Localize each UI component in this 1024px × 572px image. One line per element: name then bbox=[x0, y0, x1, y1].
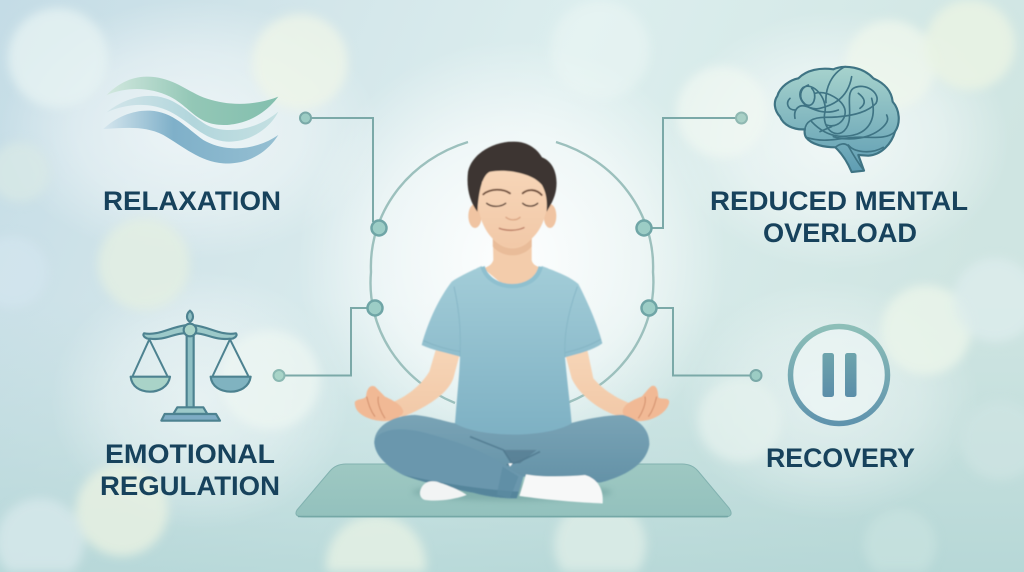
right hand bbox=[623, 386, 669, 421]
pants bbox=[374, 415, 649, 498]
label: reduced mental overload: REDUCED MENTAL bbox=[710, 186, 968, 216]
socks bbox=[420, 481, 467, 501]
icon: brain bbox=[775, 67, 899, 172]
label: reduced mental overload: OVERLOAD bbox=[763, 218, 917, 248]
left hand bbox=[355, 386, 403, 421]
label: recovery: RECOVERY bbox=[766, 443, 915, 473]
icon: waves bbox=[103, 77, 278, 163]
eyes closed bbox=[487, 203, 538, 206]
label: relaxation: RELAXATION bbox=[103, 186, 281, 216]
icon: balance scales bbox=[131, 311, 251, 421]
nose and mouth bbox=[506, 217, 520, 220]
yoga mat bbox=[296, 464, 731, 517]
face bbox=[477, 167, 548, 247]
hair bbox=[467, 142, 557, 212]
eyebrows bbox=[483, 190, 542, 195]
person meditating bbox=[355, 142, 669, 503]
connector: relaxation bbox=[300, 112, 386, 236]
label: emotional regulation bbox=[100, 439, 280, 501]
neck bbox=[483, 230, 543, 293]
ears bbox=[468, 204, 482, 228]
icon: pause bbox=[790, 326, 888, 424]
shirt bbox=[422, 266, 602, 435]
connector: recovery bbox=[642, 300, 762, 381]
label: reduced mental overload bbox=[710, 186, 968, 248]
connector: reduced mental overload bbox=[636, 112, 747, 236]
central ring bbox=[371, 142, 653, 403]
arms bbox=[390, 347, 630, 417]
label: emotional regulation: EMOTIONAL bbox=[105, 439, 275, 469]
label: emotional regulation: REGULATION bbox=[100, 471, 280, 501]
connector: emotional regulation bbox=[274, 300, 382, 381]
